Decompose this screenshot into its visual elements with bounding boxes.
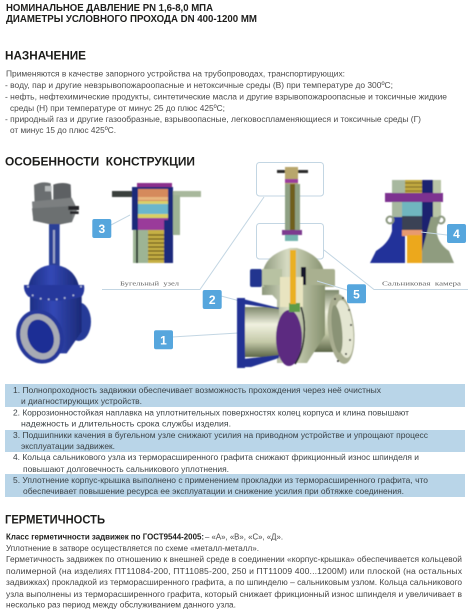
packing — [402, 202, 422, 236]
stem — [49, 224, 60, 267]
callout 2: 2 — [209, 293, 216, 307]
callout 4 — [447, 224, 466, 243]
label: yoke assembly: Бугельный узел — [120, 280, 180, 288]
cavity — [280, 277, 303, 307]
heading: design features: ОСОБЕННОСТИ КОНСТРУКЦИИ — [5, 154, 195, 168]
bearing rings — [138, 189, 168, 230]
feature 3 — [5, 430, 465, 452]
feature 3: 3. Подшипники качения в бугельном узле снижают усилия на приводном устройстве и упрощают процесс — [13, 430, 429, 440]
text block: purpose: - воду, пар и другие невзрывопожароопасные и нетоксичные среды (В) при температуре до 300ºС; — [5, 80, 393, 90]
text block: purpose: Применяются в качестве запорного устройства на трубопроводах, транспортирующих: — [6, 68, 345, 78]
text block: purpose: от минус 15 до плюс 425ºС. — [10, 125, 116, 135]
text block: tightness: Герметичность задвижек по отношению к внешней среде в соединении «корпус-крышка» обеспечивается кольцевой — [6, 554, 462, 564]
leader to callout 4 — [421, 232, 447, 235]
label: stuffing box: Сальниковая камера — [382, 280, 461, 288]
feature 5 — [5, 474, 465, 497]
callout 3: 3 — [98, 222, 105, 236]
inlet flange — [9, 303, 71, 370]
feature 2: надежность и длительность срока службы изделия. — [21, 419, 231, 429]
callout 5 — [347, 284, 366, 303]
text block: tightness: – «А», «В», «С», «Д». — [205, 532, 283, 542]
bolted flange — [24, 285, 84, 301]
housing — [132, 187, 180, 235]
feature 2: 2. Коррозионностойкая наплавка на уплотнительных поверхностях колец корпуса и клина повышают — [13, 408, 409, 418]
leader lines and frames — [102, 162, 468, 337]
text block: purpose: - природный газ и другие газообразные, взрывоопасные, легковоспламеняющиеся и токсичные среды (Г) — [5, 114, 421, 124]
illustration: blue gate valve with actuator — [9, 182, 91, 370]
illustration: sectional gate valve — [237, 167, 358, 368]
thread and walls — [133, 220, 173, 263]
upper walls — [392, 180, 441, 252]
title — [6, 3, 257, 25]
illustration: yoke assembly section — [112, 183, 201, 263]
text block: tightness: полимерной (на изделиях ПТ11084-200, ПТ11085-200, 250 и ПТ11009 400...1200М) или плоской (на остальных — [6, 566, 463, 576]
spindle — [407, 235, 422, 263]
callout 3 — [92, 219, 111, 238]
feature 3: эксплуатации задвижек. — [21, 441, 115, 451]
leader to callout 5 — [317, 281, 347, 290]
text block: purpose: среды (Н) при температуре от минус 25 до плюс 425ºС; — [10, 103, 225, 113]
spindle — [290, 250, 296, 304]
handwheel mount — [277, 167, 308, 184]
valve body — [30, 297, 82, 353]
callout 1 — [154, 330, 173, 349]
feature 4 — [13, 452, 419, 474]
callout 1: 1 — [160, 333, 167, 347]
bonnet dome — [29, 265, 79, 293]
title: НОМИНАЛЬНОЕ ДАВЛЕНИЕ PN 1,6-8,0 МПА — [6, 3, 213, 14]
feature 2 — [13, 408, 409, 429]
bonnet column — [282, 184, 302, 241]
feature 1: 1. Полнопроходность задвижки обеспечивает возможность прохождения через неё очистных — [13, 385, 382, 395]
callout 5: 5 — [353, 287, 360, 301]
illustration: stuffing box section — [370, 180, 454, 263]
feature 5: обеспечивает повышение ресурса ее эксплуатации и снижение усилия при обтяжке соединения. — [23, 486, 404, 496]
seat ring — [289, 303, 300, 312]
wedge — [276, 310, 302, 366]
actuator — [32, 182, 79, 225]
text block: tightness: узла выполнены из терморасширенного графита, который снижает фрикционный износ шпинделя и увеличивает в — [6, 589, 462, 599]
left body — [370, 217, 405, 263]
feature 1: и диагностирующих устройств. — [21, 396, 142, 406]
text block: purpose: - нефть, нефтехимические продукты, синтетические масла и другие взрывопожароопасные и токсичные жидкие — [5, 92, 447, 102]
feature 1 — [5, 384, 465, 407]
dome — [262, 248, 325, 295]
text block: tightness: задвижках) прокладкой из терморасширенного графита, а по шпинделю – сальниковым узлом. Кольца сальникового — [6, 577, 462, 587]
outlet pipe and flange — [297, 290, 358, 365]
text block: purpose — [5, 68, 447, 135]
feature list — [5, 384, 465, 497]
callout 4: 4 — [453, 227, 460, 241]
feature 5: 5. Уплотнение корпус-крышка выполнено с применением прокладки из терморасширенного графита, что — [13, 475, 428, 485]
body flange — [250, 267, 335, 289]
right body — [422, 217, 454, 263]
text block: tightness: Класс герметичности задвижек по ГОСТ9544-2005: — [6, 532, 204, 542]
shell edge — [295, 307, 304, 364]
feature 4: повышают долговечность сальникового уплотнения. — [23, 464, 229, 474]
heading: purpose: НАЗНАЧЕНИЕ — [5, 48, 86, 62]
title: ДИАМЕТРЫ УСЛОВНОГО ПРОХОДА DN 400-1200 ММ — [6, 14, 257, 25]
lower body — [263, 285, 325, 363]
eye bolts — [386, 216, 444, 224]
gland flange — [385, 193, 443, 202]
inlet pipe — [237, 298, 279, 368]
rear pipe — [66, 302, 91, 341]
callout 2 — [203, 290, 222, 309]
top flange — [112, 183, 201, 197]
text block: tightness: Уплотнение в затворе осуществляется по схеме «металл-металл». — [6, 543, 259, 553]
heading: tightness: ГЕРМЕТИЧНОСТЬ — [5, 512, 105, 526]
text block: tightness — [6, 532, 463, 609]
feature 4: 4. Кольца сальникового узла из терморасширенного графита снижают фрикционный износ шпинделя и — [13, 452, 419, 462]
